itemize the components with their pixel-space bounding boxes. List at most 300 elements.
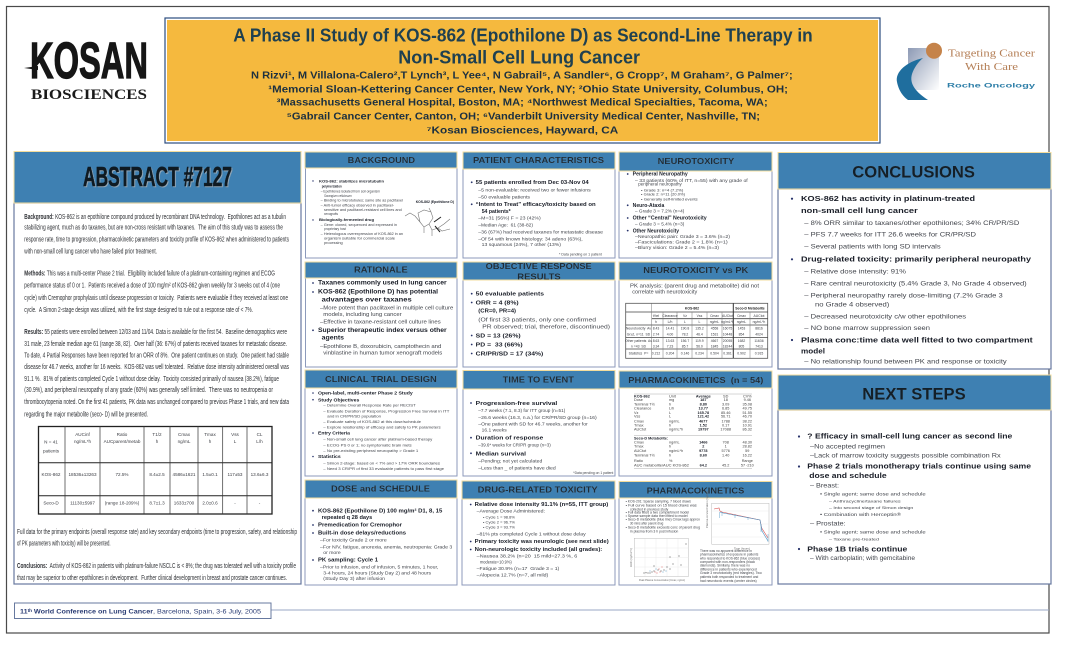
- text: next steps bullets: • Combination with Herceptin®: [820, 511, 901, 518]
- text: conclusions bullets: – Peripheral neuropathy rarely dose-limiting (7.2% Grade 3: [804, 292, 1003, 299]
- text: dose and schedule bullets: KOS-862 (Epothilone D) 100 mg/m² D1, 8, 15: [318, 508, 442, 514]
- table: neurotoxicity vs PK: Cmax: [710, 314, 719, 318]
- table: abstract PK parameters: AUCinf: [75, 432, 90, 437]
- text block: abstract results: 91.1 %. 81% of patients completed Cycle 1 without dose delay. Toxicity consisted primarily of nausea (38.2%), fatigue: [24, 376, 279, 383]
- table: PK parameters: ng/mL*h: [669, 428, 683, 432]
- table: neurotoxicity vs PK: 0.234: [695, 352, 704, 356]
- text: conclusions bullets: non-small cell lung cancer: [801, 206, 918, 215]
- table: PK parameters: h: [669, 445, 671, 449]
- text: conclusions bullets: – Decreased neurotoxicity c/w other epothilones: [804, 313, 966, 320]
- table: neurotoxicity vs PK: 4667: [711, 339, 718, 343]
- text: next steps bullets: – Anthracycline/taxane failures: [829, 498, 901, 503]
- logo: Roche Oncology: Targeting Cancer: [948, 49, 1036, 60]
- text: background bullets: Sorangium cellulosum: [324, 194, 352, 198]
- table: abstract PK parameters: ng/mL: [178, 439, 191, 444]
- text: PK sampling notes: collected in previous study: [630, 507, 669, 511]
- heading: next steps: NEXT STEPS: [862, 384, 966, 403]
- text: objective response bullets: [471, 292, 610, 357]
- text block: abstract methods: Methods: This was a multi-center Phase 2 trial. Eligibility included failure of a platinum-containing regimen and ECOG: [24, 271, 275, 278]
- text: conclusions bullets: – NO bone marrow suppression seen: [804, 325, 931, 332]
- table: PK parameters: 59: [745, 449, 749, 453]
- table: neurotoxicity vs PK: 7413: [755, 344, 763, 348]
- text: dose and schedule bullets: 3-4 hours, 24 hours (Study Day 2) and 48 hours: [323, 570, 432, 575]
- table: neurotoxicity vs PK: 8.43: [653, 326, 659, 330]
- table: neurotoxicity vs PK: t½el: [653, 314, 659, 318]
- text: dose and schedule bullets: (Study Day 3) after infusion: [323, 576, 385, 581]
- text: objective response bullets: PR observed; trial, therefore, discontinued): [482, 325, 610, 331]
- chemical structure: KOS-862: KOS-862 (Epothilone D): [416, 200, 454, 204]
- table: PK parameters: 49.75: [743, 407, 752, 411]
- heading: pharmacokinetics: PHARMACOKINETICS: [647, 486, 745, 495]
- chart: AUC vs Cmax scatter: AUC (ng/mL*h): [629, 548, 633, 567]
- text: clinical trial design bullets: – Determine Overall Response Rate per RECIST: [323, 403, 416, 408]
- text: background bullets: processing: [324, 241, 343, 245]
- text: patient characteristics bullets: [471, 180, 603, 257]
- table: neurotoxicity vs PK: 8816: [755, 326, 763, 330]
- text: dose and schedule bullets: –Prior to infusion, end of infusion, 5 minutes, 1 hour,: [320, 565, 438, 570]
- table: neurotoxicity vs PK: 56.0: [696, 344, 703, 348]
- table: neurotoxicity vs PK: 156.7: [681, 339, 689, 343]
- text: patient characteristics bullets: –M=31 (56%) F = 23 (42%): [478, 216, 541, 221]
- text: time to event bullets: Median survival: [476, 451, 526, 457]
- text: dose and schedule bullets: –For N/V, fatigue, anorexia, anemia, neutropenia: Grade 3: [320, 544, 453, 549]
- chart: concentration time curve: Time (hours): [734, 546, 750, 550]
- text: rationale bullets: advantages over taxanes: [322, 296, 412, 303]
- text block: abstract methods: cycle. A Simon 2-stage design was utilized, with the first stage designed to rule out a response rate of < 7%.: [24, 307, 253, 314]
- text: neurotoxicity bullets: –Neuropathic pain: Grade 3 = 3.6% (n=2): [635, 234, 731, 239]
- table: neurotoxicity vs PK: Other patients Av: [625, 339, 652, 343]
- table: neurotoxicity vs PK: 0.902: [737, 352, 746, 356]
- text: clinical trial design bullets: Statistics: [318, 454, 341, 459]
- text: clinical trial design bullets: – Explore relationship of efficacy and safety to PK parameters: [323, 424, 441, 429]
- table: abstract PK parameters: CL: [257, 432, 263, 437]
- text: toxicity bullets: Primary toxicity was neurologic (see next slide): [475, 539, 609, 545]
- text: patient characteristics bullets: 54 patients*: [482, 209, 512, 215]
- table: PK parameters: 35.08: [743, 402, 752, 406]
- table: PK parameters: Terminal T½: [634, 453, 656, 457]
- panel: pharmacokinetics charts: [619, 482, 772, 585]
- text block: abstract background: stabilizing agent, much as do taxanes, but are non-cross resistant with taxanes. The aim of this study was to assess the: [24, 225, 283, 232]
- table: neurotoxicity vs PK: 8.63: [653, 339, 659, 343]
- authors and affiliations: [251, 71, 793, 136]
- table: neurotoxicity vs PK: 190.8: [681, 326, 689, 330]
- table: abstract PK parameters: 72.5%: [115, 472, 129, 477]
- text block: abstract methods: cycle) with Cremophor prophylaxis until disease progression or toxicity. Patients were evaluable if they received at least one: [24, 295, 288, 302]
- table: abstract PK parameters: KOS-862: [42, 472, 61, 477]
- table: abstract PK parameters: 11130±5997: [70, 500, 95, 505]
- text block: abstract results: To date, 4 Partial Responses have been reported for an ORR of 8%. One patient continues on study. One patient had stable: [24, 353, 289, 360]
- table: neurotoxicity vs PK: 2.74: [653, 332, 659, 336]
- table: abstract PK parameters: 4586±1621: [173, 472, 196, 477]
- text: next steps bullets: – Taxane pre-treated: [829, 536, 879, 541]
- heading: neurotoxicity vs PK: NEUROTOXICITY vs PK: [643, 266, 748, 275]
- table: PK parameters: ng/mL: [669, 441, 680, 445]
- text: PK sampling notes: in plasma from 3 h post infusion: [630, 529, 679, 533]
- logo: Roche Oncology: [897, 43, 1036, 100]
- text: rationale bullets: models, including lung cancer: [323, 312, 402, 318]
- text: clinical trial design bullets: Entry Criteria: [318, 431, 350, 436]
- table: PK parameters: Tmax: [634, 445, 644, 449]
- text: neurotoxicity bullets: • Grade 2: n=11 (20.0%): [641, 193, 685, 197]
- heading: conclusions: CONCLUSIONS: [852, 162, 975, 181]
- table: neurotoxicity vs PK: L: [684, 320, 686, 324]
- table: PK parameters: Average: [696, 394, 711, 398]
- table: abstract PK parameters: Seco-D: [43, 500, 59, 505]
- table: PK parameters: 64.2: [700, 463, 707, 467]
- table: neurotoxicity vs PK: 119.9: [695, 339, 704, 343]
- text block: abstract methods: performance status of 0 or 1. Patients received a dose of 100 mg/m² of KOS-862 given weekly for 3 weeks out of 4 (one: [24, 283, 280, 290]
- text: time to event bullets: Duration of response: [476, 436, 544, 442]
- table: PK parameters: 18: [724, 398, 728, 402]
- text: toxicity bullets: –81% pts completed Cycle 1 without dose delay: [477, 531, 586, 537]
- table: PK parameters: 1788: [721, 419, 730, 423]
- table: abstract PK parameters: [38, 426, 272, 514]
- table: neurotoxicity vs PK: 0.915: [755, 352, 763, 356]
- text: conclusions bullets: KOS-862 has activity in platinum-treated: [801, 194, 975, 203]
- heading: drug-related toxicity: DRUG-RELATED TOXICITY: [478, 485, 598, 494]
- text: dose and schedule bullets: or more: [323, 550, 341, 555]
- text: next steps bullets: – Breast:: [810, 482, 839, 489]
- text: background bullets: – Binding to microtubules; same site as paclitaxel: [321, 199, 403, 203]
- table: PK parameters: 8.60: [700, 453, 707, 457]
- text: patient characteristics bullets: –50 evaluable patients: [478, 194, 531, 199]
- text: PK analysis note: correlate with neurotoxicity: [632, 289, 698, 295]
- text: time to event bullets: –39.6* weeks for CR/PR group (n=3): [478, 443, 551, 448]
- text: PK sampling notes: • Seco-D metabolite exceeds conc of parent drug: [626, 526, 700, 530]
- text: objective response bullets: (CR=0, PR=4): [478, 309, 516, 315]
- text: next steps bullets: • Single agent: same dose and schedule: [820, 530, 926, 536]
- panel: abstract: [14, 152, 301, 584]
- table: PK parameters: 45.2: [722, 463, 729, 467]
- table: PK parameters: AUC metabolite/AUC KOS-862: [634, 463, 689, 467]
- text: PK interpretation: had neurotoxic events (center circles): [700, 579, 757, 583]
- table: PK parameters: ng/mL: [669, 419, 680, 423]
- text block: abstract results: 31 male, 23 female median age 61 (range 38, 82). Over half (36: 67%) of patients received taxanes for metastatic disease.: [24, 341, 287, 348]
- chart: concentration time curve: Plasma concentration (ng/mL): [705, 491, 709, 528]
- text: neurotoxicity bullets: [627, 172, 749, 250]
- table: PK parameters: 1: [725, 445, 727, 449]
- table: PK parameters: 46.70: [743, 415, 752, 419]
- table: neurotoxicity vs PK: 10448: [723, 332, 732, 336]
- table: PK parameters: CV%: [743, 394, 752, 398]
- text: dose and schedule bullets: PK sampling: Cycle 1: [318, 558, 378, 564]
- table: PK parameters: Vz: [634, 411, 639, 415]
- text: PK interpretation: who responded to KOS-862 (blue crosses): [700, 556, 760, 560]
- text: neurotoxicity bullets: –Fasciculations: Grade 2 = 1.8% (n=1): [635, 239, 728, 244]
- table: neurotoxicity vs PK: 0.504: [710, 352, 719, 356]
- text: neurotoxicity bullets: Neuro-Ataxia: [633, 203, 665, 209]
- title banner: [165, 18, 880, 143]
- text: toxicity bullets: –Nausea 38.2% (n=20 15 mild=27.3 %, 6: [477, 554, 578, 560]
- text: background bullets: – Anti-tumor efficacy observed in paclitaxel-: [321, 203, 395, 207]
- text: objective response bullets: CR/PR/SD = 17 (34%): [476, 351, 543, 357]
- table: abstract PK parameters: 8.7±1.3: [149, 500, 165, 505]
- text: next steps bullets: – With carboplatin; with gemcitabine: [810, 555, 916, 562]
- table: neurotoxicity vs PK: 0.204: [666, 352, 674, 356]
- authors and affiliations: N Rizvi¹, M Villalona-Calero²,T Lynch³, L Yee⁴, N Gabrail⁵, A Sandler⁶, G Cropp⁷, M Graham⁷, G Palmer⁷;: [251, 71, 793, 82]
- panel: drug-related toxicity: [462, 481, 615, 585]
- table: neurotoxicity vs PK: 1682: [738, 339, 745, 343]
- panel: pharmacokinetics table: [619, 371, 772, 476]
- table: PK parameters: 10.91: [743, 424, 752, 428]
- table: PK parameters: SD: [723, 394, 729, 398]
- table: abstract PK parameters: 18536±13263: [68, 472, 97, 477]
- table: neurotoxicity vs PK: ng/mL: [737, 320, 746, 324]
- heading: patient characteristics: PATIENT CHARACTERISTICS: [473, 156, 605, 165]
- table: abstract PK parameters: patients: [43, 449, 60, 454]
- table: PK parameters: [634, 394, 754, 468]
- text: background bullets: [312, 178, 403, 245]
- text: PK analysis note: [630, 283, 760, 295]
- text: background bullets: KOS-862: stabilizes microtubulin: [319, 178, 385, 183]
- table: PK parameters: 57 -210: [741, 463, 754, 467]
- logo: Kosan Biosciences: KOSAN: [30, 32, 148, 89]
- table: neurotoxicity vs PK: Vss: [697, 314, 703, 318]
- table: abstract PK parameters: N = 41: [44, 439, 58, 444]
- text: toxicity bullets: moderate=10.9%): [480, 559, 512, 565]
- text: patient characteristics bullets: 55 patients enrolled from Dec 03-Nov 04: [476, 180, 589, 186]
- text: PK sampling notes: • Sparse sample data then fitted to model: [626, 514, 688, 518]
- table: PK parameters: 51.55: [743, 411, 752, 415]
- table: abstract PK parameters: 8.4±2.5: [149, 472, 165, 477]
- text: conclusions bullets: model: [801, 347, 825, 356]
- text: background bullets: – Gene: cloned, sequenced and expressed in: [321, 223, 397, 227]
- text: next steps bullets: ? Efficacy in small-cell lung cancer as second line: [807, 432, 1012, 441]
- text: background bullets: sensitive and paclitaxel-resistant cell lines and: [324, 208, 402, 212]
- table: PK parameters: 3.09: [722, 402, 729, 406]
- text: conclusions bullets: – 8% ORR similar to taxanes/other epothilones; 34% CR/PR/SD: [804, 220, 1020, 227]
- text block: abstract results: thrombocytopenia noted. On the first 41 patients, PK data was unchanged compared to previous Phase 1 trials, and new data: [24, 399, 289, 406]
- text: background bullets: polymerization: [322, 183, 342, 188]
- text block: abstract closing: that may be superior to other epothilones in development. Further clinical development in breast and prostate cancer continues.: [17, 575, 287, 582]
- text block: abstract closing: [17, 529, 297, 582]
- table: neurotoxicity vs PK: 11636: [754, 339, 764, 343]
- authors and affiliations: ³Massachusetts General Hospital, Boston, MA; ⁴Northwest Medical Specialties, Tacoma, WA;: [277, 98, 768, 109]
- table: PK parameters: 19797: [698, 428, 709, 432]
- text: PK interpretation: There was no apparent difference in: [700, 549, 752, 553]
- table: neurotoxicity vs PK: h: [655, 320, 657, 324]
- text: background bullets: proprietary host: [324, 227, 346, 231]
- text: clinical trial design bullets: – Evaluate safety of KOS-862 at this dose/schedule: [323, 419, 421, 424]
- table: PK parameters: L/h: [669, 407, 674, 411]
- text: clinical trial design bullets: – No pre-existing peripheral neuropathy > Grade 1: [323, 448, 418, 453]
- panel: clinical trial design: [305, 370, 457, 476]
- text: PK interpretation: patients both responded to treatment and: [700, 575, 758, 579]
- text: PK interpretation: compared with non-responders (black: [700, 560, 755, 564]
- logo: Roche Oncology: Roche Oncology: [947, 83, 1036, 90]
- text: time to event bullets: –26.6 weeks (16.3, n.a.) for CR/PR/SD group (n=16): [478, 415, 597, 420]
- table: neurotoxicity vs PK: Seco-D Metabolite: [735, 306, 765, 310]
- table: abstract PK parameters: -: [259, 500, 261, 505]
- table: PK parameters: Seco-D Metabolite:: [634, 437, 668, 441]
- table: neurotoxicity vs PK: 1845: [711, 344, 718, 348]
- table: PK parameters: L: [669, 415, 671, 419]
- text: conclusions bullets: [791, 194, 1033, 365]
- text: clinical trial design bullets: and in CR/PR/SD population: [327, 413, 381, 418]
- table: PK parameters: Ratio: [634, 459, 643, 463]
- text: neurotoxicity bullets: Peripheral Neuropathy: [633, 172, 688, 178]
- text: patient characteristics bullets: * Data pending on 1 patient: [559, 253, 602, 257]
- text: next steps bullets: – Into second stage of Simon design: [829, 505, 913, 510]
- text: dose and schedule bullets: Premedication for Cremophor: [318, 523, 402, 529]
- text: rationale bullets: –More potent than paclitaxel in multiple cell culture: [320, 305, 453, 311]
- table: PK parameters: L: [669, 411, 671, 415]
- table: PK parameters: mg: [669, 398, 674, 402]
- logo: Kosan Biosciences: [24, 32, 148, 103]
- text: rationale bullets: –Effective in taxane-resistant cell culture lines: [320, 320, 441, 326]
- footer: conference: [14, 603, 1049, 618]
- table: PK parameters: 17088: [720, 428, 731, 432]
- table: PK parameters: 13.77: [699, 407, 708, 411]
- panel: rationale: [305, 262, 457, 367]
- panel: time to event: [463, 370, 615, 476]
- text: time to event bullets: Progression-free survival: [476, 401, 558, 407]
- text: rationale bullets: Taxanes commonly used in lung cancer: [318, 280, 447, 287]
- text: next steps bullets: [798, 432, 1031, 562]
- text: clinical trial design bullets: – Need 3 CR/PR of first 33 evaluable patients to pass first stage: [323, 466, 444, 471]
- table: neurotoxicity vs PK: ng/mL*h: [721, 320, 734, 324]
- table: PK parameters: 86.32: [743, 428, 752, 432]
- table: PK parameters: 708: [723, 441, 729, 445]
- text: dose and schedule bullets: repeated q 28 days: [322, 515, 372, 521]
- text block: abstract closing: Conclusions: Activity of KOS-862 in patients with platinum-failure NSCLC is < 8%; the drug was tolerated well with a toxicity profile: [17, 563, 296, 570]
- text: patient characteristics bullets: –Median Age: 61 (38-82): [478, 223, 533, 228]
- text: conclusions bullets: – No relationship found between PK and response or toxicity: [804, 358, 1008, 365]
- text: objective response bullets: (Of first 33 patients, only one confirmed: [478, 317, 596, 323]
- text: objective response bullets: 50 evaluable patients: [476, 292, 544, 298]
- table: PK parameters: 28.82: [743, 445, 752, 449]
- table: abstract PK parameters: -: [234, 500, 236, 505]
- text: neurotoxicity bullets: Other “Central” Neurotoxicity: [633, 216, 707, 222]
- panel: patient characteristics: [463, 152, 615, 258]
- text: conclusions bullets: – Rare central neurotoxicity (5.4% Grade 3, No Grade 4 observed): [804, 280, 1027, 287]
- text: toxicity bullets: Non-neurologic toxicity included (all grades):: [475, 547, 603, 553]
- table: PK parameters: 165.78: [697, 411, 709, 415]
- table: PK parameters: %: [669, 459, 673, 463]
- table: neurotoxicity vs PK: L/h: [668, 320, 672, 324]
- text: next steps bullets: dose and schedule: [809, 471, 887, 480]
- table: neurotoxicity vs PK: 135.2: [695, 326, 704, 330]
- authors and affiliations: ⁷Kosan Biosciences, Hayward, CA: [427, 125, 618, 136]
- panel: neurotoxicity vs PK: [619, 262, 772, 367]
- text block: abstract background: with non-small cell lung cancer who have failed prior treatment.: [24, 248, 157, 255]
- text block: abstract closing: of PK parameters with toxicity) will be presented.: [17, 541, 111, 548]
- text block: abstract methods: [24, 271, 288, 314]
- text: toxicity bullets: –Average Dose Administered:: [477, 509, 545, 515]
- text block: abstract results: (30.9%), and peripheral neuropathy of any grade (60%) was generally self limited. There was no neutropenia or: [24, 387, 273, 394]
- table: abstract PK parameters: L/h: [256, 439, 263, 444]
- heading: objective response results: RESULTS: [517, 273, 561, 282]
- text: neurotoxicity bullets: –Blurry vision: Grade 2 = 5.4% (n=3): [635, 245, 720, 250]
- table: PK parameters: KOS-862: [634, 394, 650, 398]
- text: toxicity bullets: –Alopecia 12.7% (n=7, all mild): [477, 573, 549, 579]
- text: PK analysis note: PK analysis: (parent drug and metabolite) did not: [630, 283, 760, 289]
- text: clinical trial design bullets: Open-label, multi-center Phase 2 Study: [318, 391, 413, 396]
- text: patient characteristics bullets: “Intent to Treat” efficacy/toxicity based on: [476, 202, 596, 208]
- text: neurotoxicity bullets: – 33 patients (60% of ITT, n=55) with any grade of: [635, 178, 749, 183]
- text: conclusions bullets: – Several patients with long SD intervals: [804, 243, 941, 250]
- table: PK parameters: Cmax: [634, 419, 644, 423]
- table: neurotoxicity vs PK: 85.7: [682, 344, 688, 348]
- table: abstract PK parameters: 1633±700: [174, 500, 195, 505]
- table: PK parameters: 56.71: [721, 415, 730, 419]
- table: PK parameters: 4677: [699, 419, 708, 423]
- table: abstract PK parameters: 13.6±6.3: [251, 472, 269, 477]
- table: PK parameters: 1.52: [700, 424, 707, 428]
- text: neurotoxicity bullets: – Grade 3 = 5.4% (n=3): [635, 222, 685, 227]
- heading: background: BACKGROUND: [348, 156, 415, 165]
- table: neurotoxicity vs PK: AUCtot: [722, 314, 733, 318]
- text: background bullets: Biologically-fermented drug: [319, 217, 375, 222]
- table: PK parameters: h: [669, 402, 671, 406]
- text: rationale bullets: KOS-862 (Epothilone D) has potential: [318, 289, 438, 296]
- table: PK parameters: h: [669, 424, 671, 428]
- chart: AUC vs Cmax scatter: Peak Plasma Concentration [Cmax, ng/mL]: [639, 578, 685, 582]
- text block: abstract results: disease for 46.7 weeks, another for 16 weeks. KOS-862 was well tolerated. Relative dose intensity administered overall was: [24, 364, 289, 371]
- text: patient characteristics bullets: –5 non-evaluable: received two or fewer infusions: [478, 188, 591, 193]
- logo: Kosan Biosciences: BIOSCIENCES: [31, 87, 147, 103]
- table: neurotoxicity vs PK: 4024: [755, 332, 763, 336]
- table: neurotoxicity vs PK: 16075: [723, 326, 732, 330]
- text: time to event bullets: 16.1 weeks: [482, 427, 507, 432]
- table: neurotoxicity vs PK: n =43 SD: [631, 344, 647, 348]
- chart: concentration time curve: [705, 491, 769, 550]
- panel: background: [305, 152, 457, 258]
- table: abstract PK parameters: h: [156, 439, 159, 444]
- text: time to event bullets: –Less than _ of patients have died: [478, 465, 556, 470]
- text block: abstract results: regarding the major metabolite (seco- D) will be presented.: [24, 412, 148, 419]
- table: PK parameters: Tmax: [634, 424, 644, 428]
- text: PK sampling notes: • KOS-201: Sparse sampling, 7 blood draws: [626, 500, 691, 504]
- table: neurotoxicity vs PK: 46.4: [696, 332, 703, 336]
- text block: abstract background: Background: KOS-862 is an epothilone compound produced by recombinant DNA technology. Epothilones act as a tubulin: [24, 214, 286, 221]
- text: neurotoxicity bullets: Other Neurotoxicity: [633, 228, 679, 234]
- logo: Roche Oncology: With Care: [965, 62, 1018, 73]
- text: next steps bullets: Phase 2 trials monotherapy trials continue using same: [807, 462, 1031, 471]
- text: PK sampling notes: • Seco-D metabolite (blue line) Cmax lags approx: [626, 518, 700, 522]
- table: PK parameters: 38.22: [743, 419, 752, 423]
- text: toxicity bullets: [470, 502, 609, 579]
- text: toxicity bullets: • Cycle 3 = 93.7%: [483, 526, 515, 530]
- text: PK sampling notes: • Full curve based on 15 blood draws was: [626, 503, 697, 507]
- table: abstract PK parameters: ng/mL*h: [74, 439, 91, 444]
- table: PK parameters: 9.46: [744, 398, 751, 402]
- chemical structure: KOS-862: [405, 200, 454, 236]
- table: neurotoxicity vs PK: 0.212: [652, 352, 660, 356]
- table: neurotoxicity vs PK: Clearance: [662, 314, 678, 318]
- table: neurotoxicity vs PK: [625, 303, 768, 358]
- text: objective response bullets: PD = 33 (66%): [476, 342, 523, 348]
- heading: rationale: RATIONALE: [354, 266, 408, 274]
- table: PK parameters: 1466: [699, 441, 708, 445]
- text: PK sampling notes: 30 mins after parent drug: [630, 522, 664, 526]
- text: background bullets: – Epothilones isolated from soil organism: [321, 190, 380, 194]
- table: abstract PK parameters: Ratio: [117, 432, 128, 437]
- text: time to event bullets: –7.7 weeks (7.1, 8.3) for ITT group (n=51): [478, 408, 566, 413]
- table: neurotoxicity vs PK: 805: [739, 344, 744, 348]
- text: neurotoxicity bullets: • Generally self-limited events: [641, 197, 698, 201]
- table: neurotoxicity vs PK: 13.63: [666, 339, 674, 343]
- table: neurotoxicity vs PK: Gr≥2, n=11 SD: [627, 332, 651, 336]
- text: time to event bullets: –Pending; not yet calculated: [478, 458, 543, 463]
- table: neurotoxicity vs PK: 4.00: [667, 332, 673, 336]
- title: A Phase II Study of KOS-862 (Epothilone D) as Second-Line Therapy in: [233, 25, 813, 46]
- authors and affiliations: ¹Memorial Sloan-Kettering Cancer Center, New York, NY; ²Ohio State University, Columbus, OH;: [268, 84, 788, 95]
- text: clinical trial design bullets: [312, 391, 450, 471]
- table: PK parameters: Clearance: [634, 407, 651, 411]
- table: PK parameters: 8.80: [700, 402, 707, 406]
- text: neurotoxicity bullets: – Grade 3 = 7.2% (n=4): [635, 209, 685, 214]
